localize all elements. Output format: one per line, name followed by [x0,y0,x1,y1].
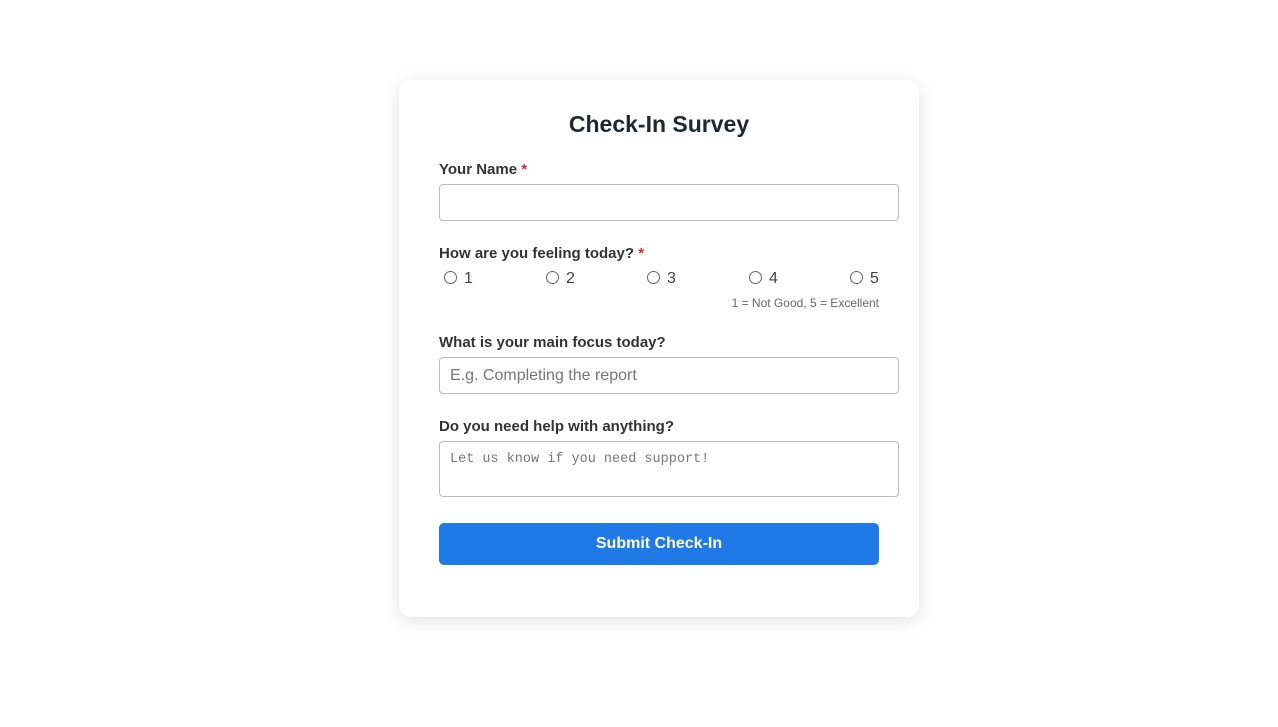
button: submit: Submit Check-In [596,535,722,552]
radio group: 1 [464,270,473,287]
input: focus: E.g. Completing the report [450,367,637,384]
scale hint: 1 = Not Good, 5 = Excellent [732,296,879,310]
label: focus: What is your main focus today? [439,334,666,351]
label: help: Do you need help with anything? [439,418,674,435]
panel: survey card [399,80,919,617]
radio group: 5 [870,270,879,287]
textarea: help: Let us know if you need support! [450,452,709,467]
button: submit [439,523,879,565]
radio group: 4 [769,270,778,287]
label: name: Your Name * [439,161,527,178]
title: Check-In Survey [569,111,749,137]
radio group: 3 [667,270,676,287]
input: name [439,184,899,221]
label: feeling: How are you feeling today? * [439,245,644,262]
textarea: help [439,441,899,497]
radio group [444,270,879,287]
input: focus [439,357,899,394]
radio group: 2 [566,270,575,287]
